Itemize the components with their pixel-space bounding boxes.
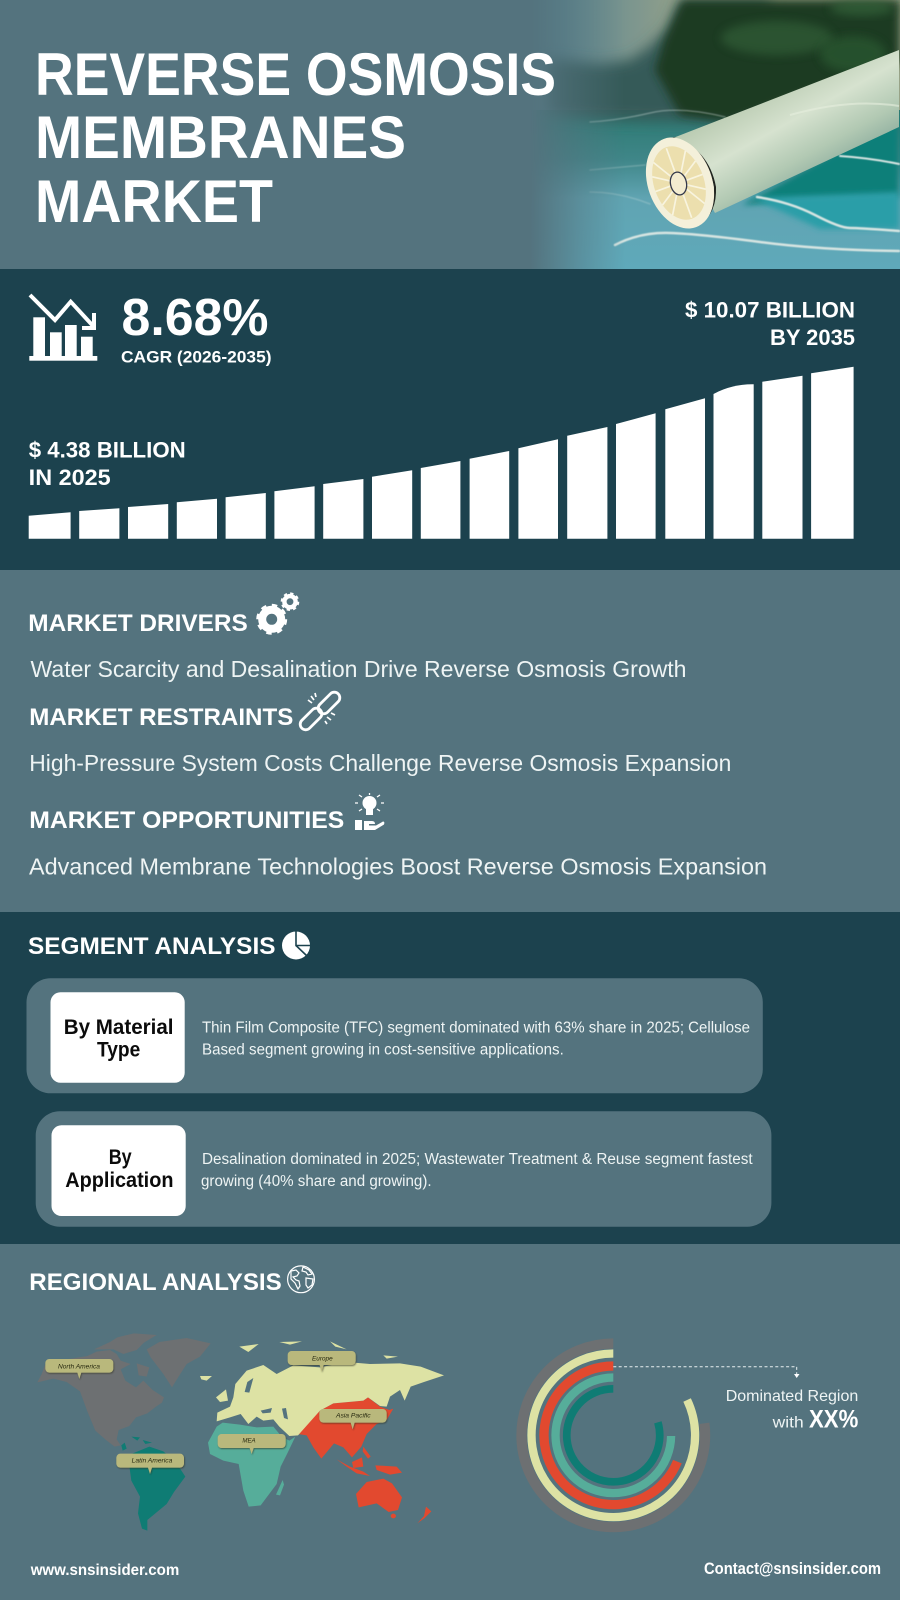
icon: chart with falling arrow	[29, 295, 97, 361]
heading: market restraints: MARKET RESTRAINTS	[29, 704, 293, 731]
CAGR value: 8.68%	[122, 289, 268, 347]
title: MARKET	[35, 168, 273, 235]
radial bar chart	[521, 1344, 705, 1527]
2035 market value: BY 2035	[770, 325, 855, 350]
callout: dominated region: with	[772, 1414, 804, 1431]
region: North America	[37, 1333, 211, 1447]
panel: market size	[0, 269, 900, 570]
region: Latin America	[121, 1437, 185, 1531]
bar chart: market growth	[29, 367, 854, 539]
card: by application: By	[109, 1146, 132, 1169]
panel: market dynamics	[28, 593, 767, 880]
title	[35, 41, 556, 235]
callout: Europe: Europe	[312, 1355, 333, 1362]
callout: Latin America: Latin America	[132, 1458, 173, 1465]
2035 market value	[685, 298, 855, 350]
callout: Asia Pacific: Asia Pacific	[335, 1413, 371, 1420]
card: by material type: Type	[97, 1038, 140, 1062]
heading: market opportunities: MARKET OPPORTUNITIES	[29, 807, 344, 834]
icon: pie chart	[282, 932, 310, 960]
callout: dominated region	[726, 1388, 858, 1433]
heading: segment analysis: SEGMENT ANALYSIS	[28, 933, 276, 960]
region: Europe and north Asia	[200, 1341, 444, 1436]
text: drivers summary: Water Scarcity and Desalination Drive Reverse Osmosis Growth	[30, 656, 686, 682]
icon: globe	[288, 1266, 314, 1293]
card: by application: growing (40% share and growing).	[201, 1173, 432, 1190]
hero photo: membrane over water	[520, 0, 900, 269]
callout: Asia Pacific	[319, 1409, 387, 1429]
region: Asia Pacific	[298, 1397, 431, 1523]
callout: dominated region: XX%	[809, 1405, 858, 1433]
CAGR label: CAGR (2026-2035)	[121, 348, 272, 366]
footer: contact: Contact@snsinsider.com	[704, 1560, 881, 1578]
title: REVERSE OSMOSIS	[35, 41, 556, 108]
card: by material type: Based segment growing in cost-sensitive applications.	[202, 1041, 564, 1058]
2025 market value: $ 4.38 BILLION	[29, 438, 186, 462]
card: by material type	[26, 978, 763, 1093]
callout: Latin America	[116, 1454, 184, 1474]
world map	[37, 1333, 444, 1531]
heading: market drivers: MARKET DRIVERS	[28, 610, 248, 637]
footer: website: www.snsinsider.com	[30, 1562, 179, 1579]
card: by material type: By Material	[64, 1016, 173, 1039]
icon: broken chain link	[298, 690, 342, 732]
region: Middle East and Africa	[208, 1423, 295, 1507]
2025 market value	[29, 438, 186, 490]
callout: MEA: MEA	[242, 1438, 256, 1445]
callout: MEA	[218, 1434, 286, 1454]
card: by material type: Thin Film Composite (TFC) segment dominated with 63% share in 2025; Cellulose	[202, 1020, 750, 1036]
callout: dominated region: Dominated Region	[726, 1388, 858, 1405]
panel: segment analysis	[0, 912, 900, 1244]
leader line with arrow	[613, 1367, 800, 1378]
card: by application: Desalination dominated in 2025; Wastewater Treatment & Reuse segment fastest	[202, 1151, 753, 1168]
callout: Europe	[288, 1351, 356, 1372]
heading: regional analysis: REGIONAL ANALYSIS	[29, 1269, 282, 1296]
icon: lightbulb on hand	[355, 793, 384, 830]
2025 market value: IN 2025	[29, 465, 111, 490]
card: by application	[36, 1111, 771, 1227]
callout: North America: North America	[58, 1363, 100, 1370]
2035 market value: $ 10.07 BILLION	[685, 298, 855, 322]
icon: gears	[258, 593, 298, 633]
text: opportunities summary: Advanced Membrane Technologies Boost Reverse Osmosis Expansion	[29, 854, 767, 880]
card: by application: Application	[65, 1169, 174, 1192]
title: MEMBRANES	[35, 104, 406, 171]
callout: North America	[45, 1359, 113, 1379]
text: restraints summary: High-Pressure System Costs Challenge Reverse Osmosis Expansion	[29, 750, 731, 776]
